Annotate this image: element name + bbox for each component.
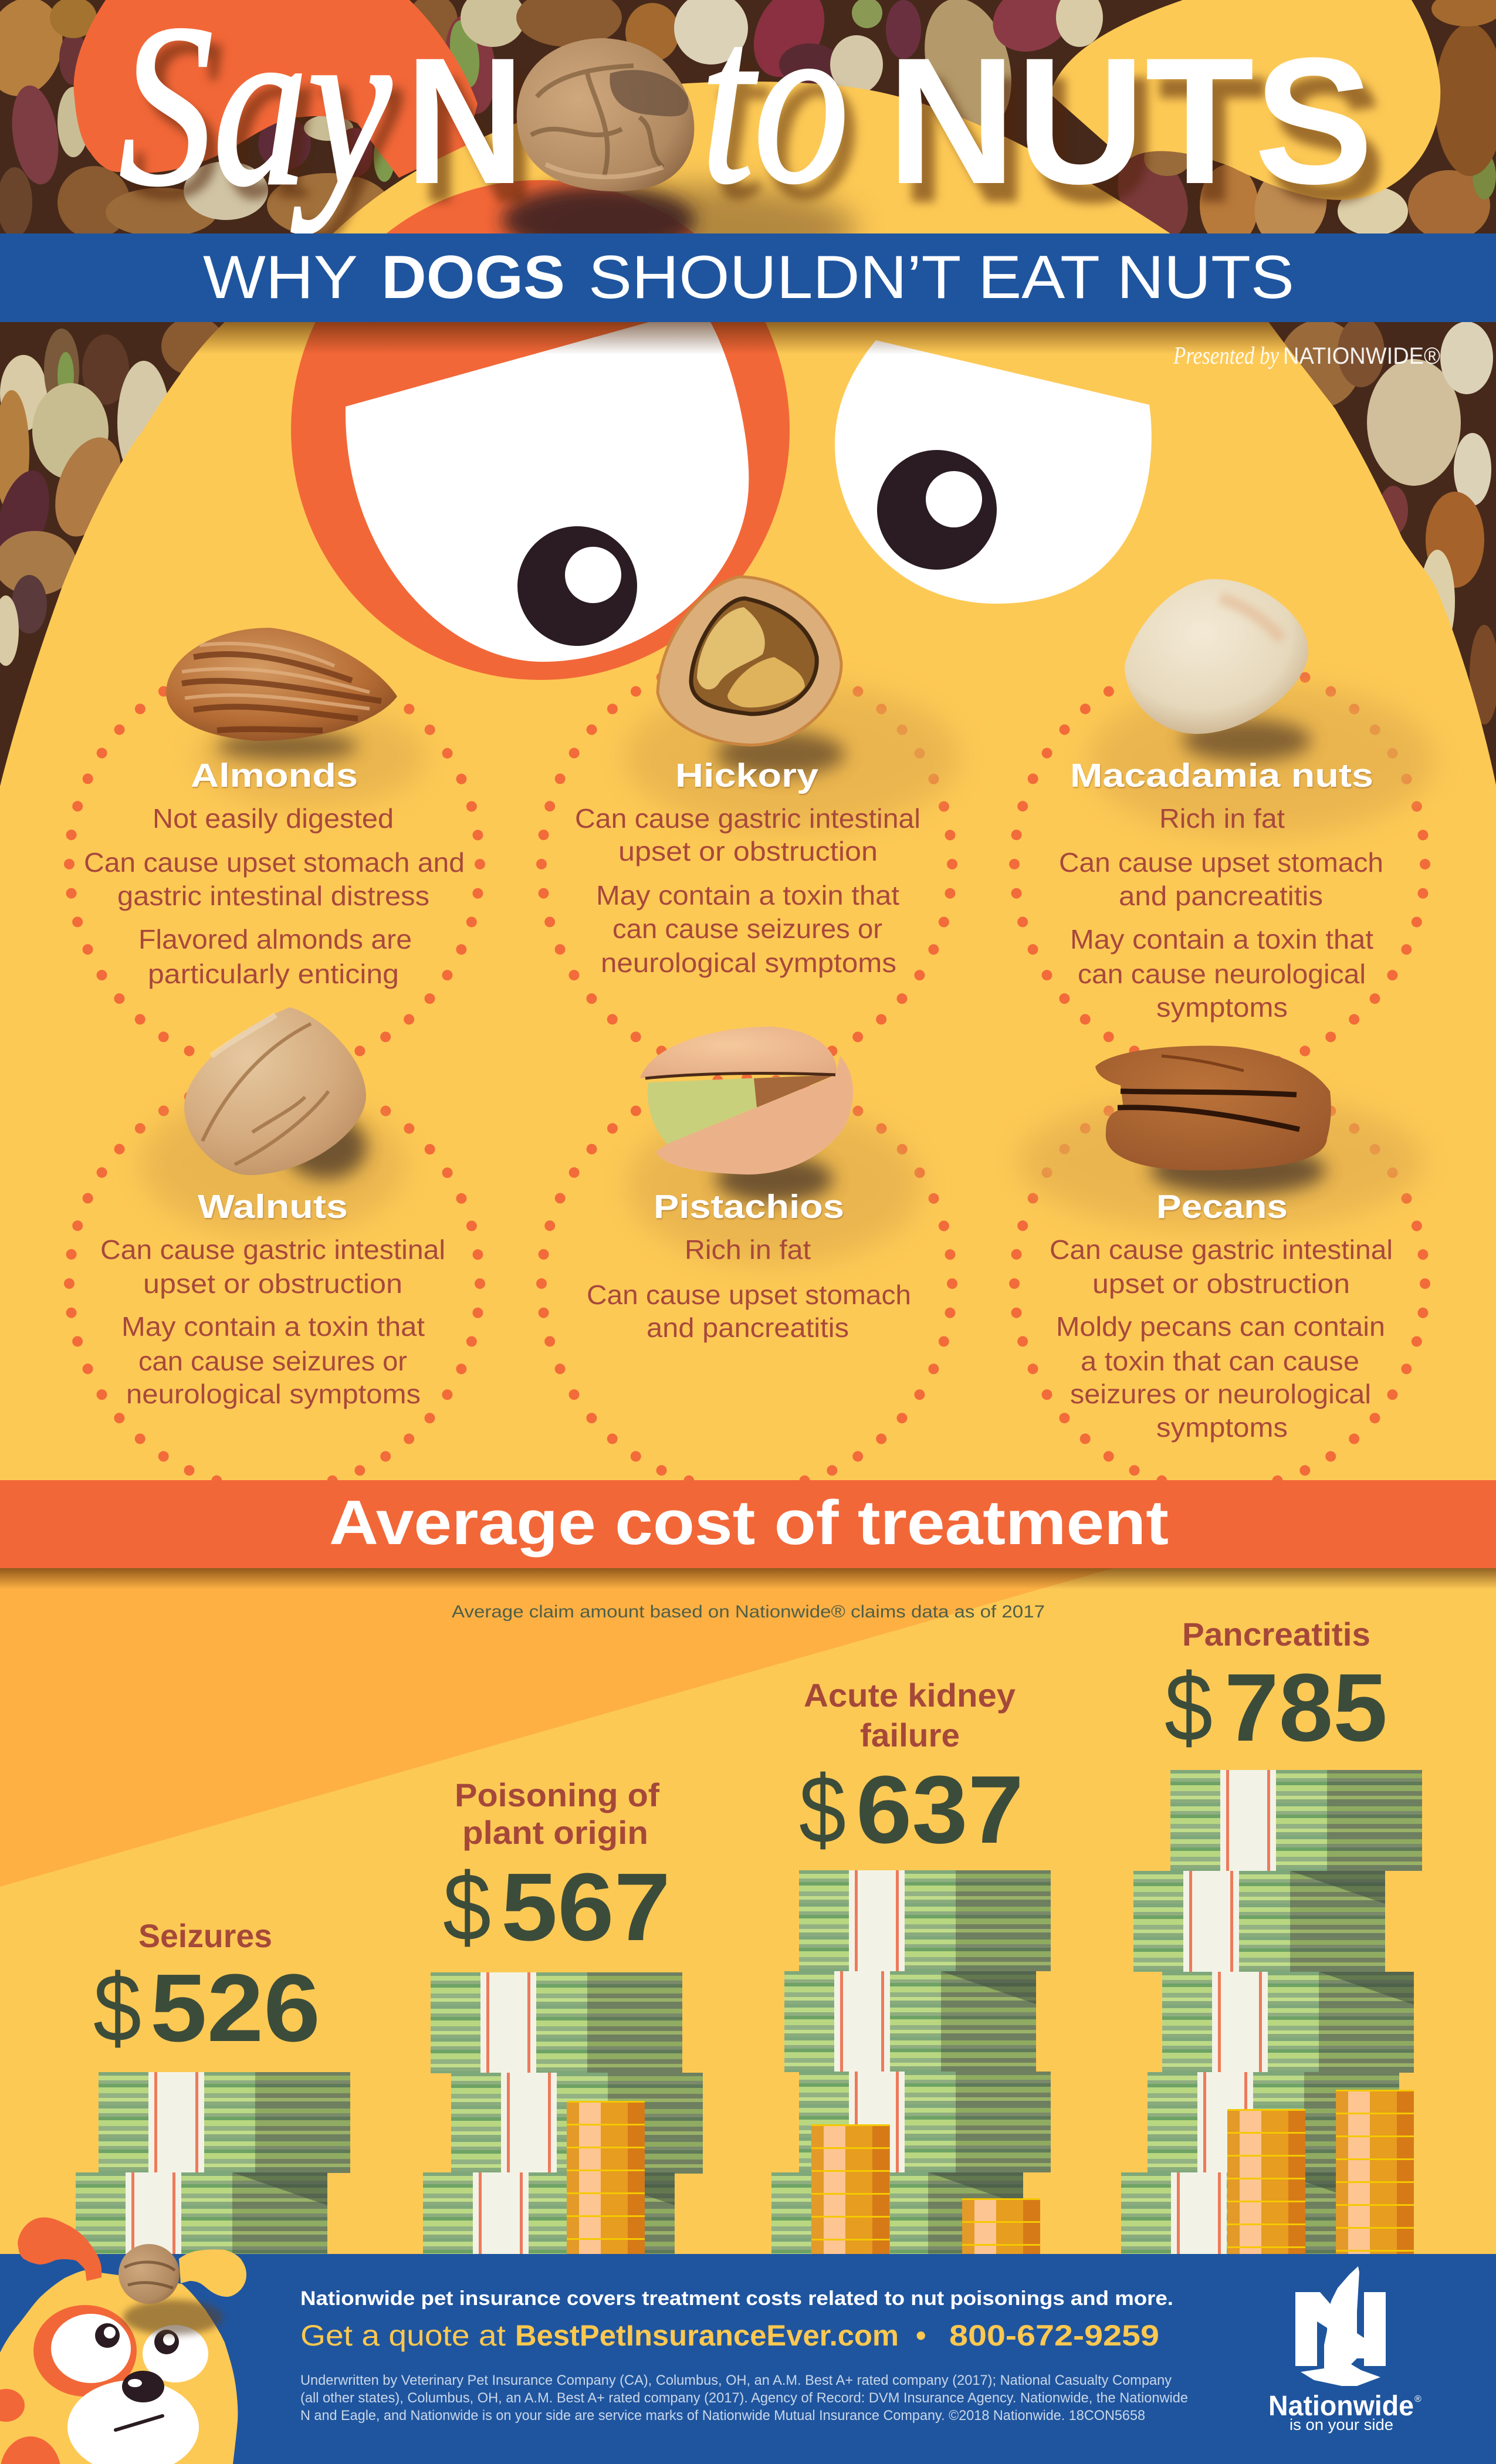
panel: macadamia nuts: can cause neurological [1078,959,1366,989]
money stack [76,2072,350,2273]
title walnut drop shadow [502,185,857,273]
lower section yellow background [0,1568,1496,2255]
money stack [423,1972,703,2273]
nut on dog head [119,2244,180,2304]
panel: walnuts: neurological symptoms [126,1379,421,1409]
cost column: pancreatitis [1121,1616,1422,2273]
money stack [1121,1770,1422,2273]
panel: pecans: Moldy pecans can contain [1056,1311,1385,1342]
right eye white [835,340,1152,604]
panel: almonds: Can cause upset stomach and [84,847,465,878]
dog ear: right yellow [1050,0,1440,200]
Nationwide logo: Nationwide [1268,2391,1414,2422]
presented by Nationwide [1173,343,1440,370]
presented by Nationwide: Presented by [1173,343,1279,370]
cost column: acute kidney failure: Acute kidney [804,1677,1016,1714]
icon: hickory nut half [658,577,841,745]
title walnut acting as the letter O [517,38,694,191]
panel: pecans: symptoms [1156,1412,1288,1443]
panel: pistachios: Pistachios [654,1188,844,1226]
panel: walnuts: Can cause gastric intestinal [100,1234,445,1265]
panel: pecans: seizures or neurological [1070,1379,1371,1409]
dotted circles around nut facts [69,659,1425,1489]
right pupil [877,450,997,570]
panel: walnuts [100,1007,445,1409]
left eye [51,2314,131,2383]
cost column: pancreatitis: 785 [1224,1654,1387,1761]
coin stack: short [962,2198,1040,2255]
panel: pistachios: Rich in fat [685,1234,811,1265]
right eye [143,2325,208,2382]
footer call to action: Get a quote at [300,2319,506,2352]
panel: hickory: May contain a toxin that [596,880,899,911]
panel: walnuts: Walnuts [198,1188,348,1226]
footer call to action: 800-672-9259 [949,2319,1159,2352]
panel: pecans: Pecans [1156,1188,1288,1226]
cost column: poisoning of plant origin: 567 [501,1853,671,1961]
panel: pecans: a toxin that can cause [1081,1346,1359,1376]
title: N: N [405,21,524,222]
cost column: acute kidney failure [771,1677,1051,2273]
cost column: seizures [76,1917,350,2273]
panel: almonds: gastric intestinal distress [117,881,429,911]
panel: pistachios: Can cause upset stomach [587,1280,911,1310]
panel: macadamia nuts: and pancreatitis [1119,881,1323,911]
cost column: seizures: $ [93,1954,141,2062]
dog ear: orange [18,2218,101,2281]
Nationwide logo: ® [1414,2394,1421,2404]
panel: hickory: neurological symptoms [601,947,896,978]
cost column: pancreatitis: Pancreatitis [1182,1616,1370,1653]
panel: almonds: Almonds [191,757,358,794]
icon: pistachio [640,1027,853,1175]
subtitle band: WHY [203,243,358,312]
cost column: pancreatitis: $ [1165,1654,1213,1761]
cost column: poisoning of plant origin [423,1776,703,2273]
coin stack: left [1227,2109,1305,2255]
footer legal text: Underwritten by Veterinary Pet Insurance Company (CA), Columbus, OH, an A.M. Best A+ rated company (2017); National Casualty Company [300,2372,1172,2388]
cost column: poisoning of plant origin: plant origin [462,1814,648,1851]
panel: pistachios: and pancreatitis [647,1312,849,1343]
panel: pecans [1018,1046,1423,1443]
orange spots [0,2389,61,2464]
icon: almond [166,628,397,741]
panel: macadamia nuts [1059,579,1434,1023]
icon: macadamia nut [1125,579,1308,734]
panel: pecans: Can cause gastric intestinal [1050,1234,1393,1265]
Nationwide logo: is on your side [1289,2416,1393,2433]
presented by Nationwide: NATIONWIDE® [1283,343,1440,369]
panel: hickory: Hickory [675,757,818,794]
left eye white [346,322,749,662]
icon: walnut [184,1007,366,1175]
panel: walnuts: upset or obstruction [143,1268,402,1299]
mouth [116,2416,163,2430]
panel: walnuts: May contain a toxin that [121,1311,425,1342]
footer band [0,2254,1496,2464]
cost column: acute kidney failure: $ [799,1756,846,1863]
footer legal text: (all other states), Columbus, OH, an A.M. Best A+ rated company (2017). Agency of Record: DVM Insurance Agency. Nationwide, the Nationwide [300,2390,1188,2406]
dog ear: left orange [74,0,478,178]
cost column: seizures: 526 [150,1954,320,2062]
muzzle [67,2380,199,2464]
panel: macadamia nuts: Macadamia nuts [1070,757,1373,794]
dog head: yellow face shape [0,82,1496,1584]
subtitle band [0,233,1496,322]
cost column: poisoning of plant origin: $ [443,1853,491,1961]
eye ring [33,2305,137,2397]
heading band: average cost of treatment [0,1480,1496,1568]
footer legal text: N and Eagle, and Nationwide is on your side are service marks of Nationwide Mutual Insurance Company. ©2018 Nationwide. 18CON5658 [300,2408,1145,2424]
footer call to action: BestPetInsuranceEver.com [515,2319,899,2352]
nose [122,2371,164,2402]
subtitle band: DOGS [381,243,565,312]
cost column: poisoning of plant origin: Poisoning of [455,1776,659,1813]
orange ring around left eye [291,180,790,680]
panel: macadamia nuts: May contain a toxin that [1070,924,1373,955]
footer legal text [300,2372,1188,2424]
footer call to action [300,2319,1159,2352]
Nationwide logo [1268,2266,1421,2433]
background: mixed nut photo texture [0,0,1496,821]
claims data note: Average claim amount based on Nationwide® claims data as of 2017 [452,1602,1045,1622]
cost column: acute kidney failure: failure [860,1717,960,1754]
shadow under cost heading band [0,1568,1496,1589]
title: NUTS: NUTS [887,21,1373,222]
left pupil [517,526,637,646]
icon: pecan [1095,1046,1331,1170]
panel: almonds: Not easily digested [153,803,394,834]
cost column: seizures: Seizures [138,1917,272,1954]
panel: hickory [575,577,959,978]
panel: almonds [84,628,465,989]
mascot dog at bottom left [0,2218,246,2464]
money stack [771,1870,1051,2273]
dog head [0,2270,238,2464]
footer call to action: • [916,2319,926,2352]
footer coverage statement: Nationwide pet insurance covers treatment costs related to nut poisonings and more. [300,2287,1173,2310]
coin stack [567,2101,645,2255]
subtitle band: SHOULDN’T EAT NUTS [588,243,1294,312]
panel: macadamia nuts: Can cause upset stomach [1059,847,1383,878]
orange diagonal wedge [0,1568,1113,1887]
nut shadow [123,2300,223,2335]
coin stack: right [1336,2090,1414,2255]
panel: macadamia nuts: Rich in fat [1159,803,1285,834]
panel: hickory: Can cause gastric intestinal [575,803,920,834]
panel: walnuts: can cause seizures or [138,1346,407,1376]
shadow under subtitle band [0,322,1496,354]
panel: pecans: upset or obstruction [1092,1268,1350,1299]
coin stack: tall [811,2124,890,2255]
dog ear: yellow [179,2249,246,2297]
panel: pistachios [587,1027,921,1343]
panel: almonds: particularly enticing [148,959,399,989]
heading band: average cost of treatment: Average cost of treatment [329,1487,1169,1558]
panel: macadamia nuts: symptoms [1156,992,1288,1023]
panel: hickory: can cause seizures or [612,913,882,944]
panel: hickory: upset or obstruction [618,836,878,867]
panel: almonds: Flavored almonds are [138,924,412,955]
cost column: acute kidney failure: 637 [856,1756,1024,1863]
